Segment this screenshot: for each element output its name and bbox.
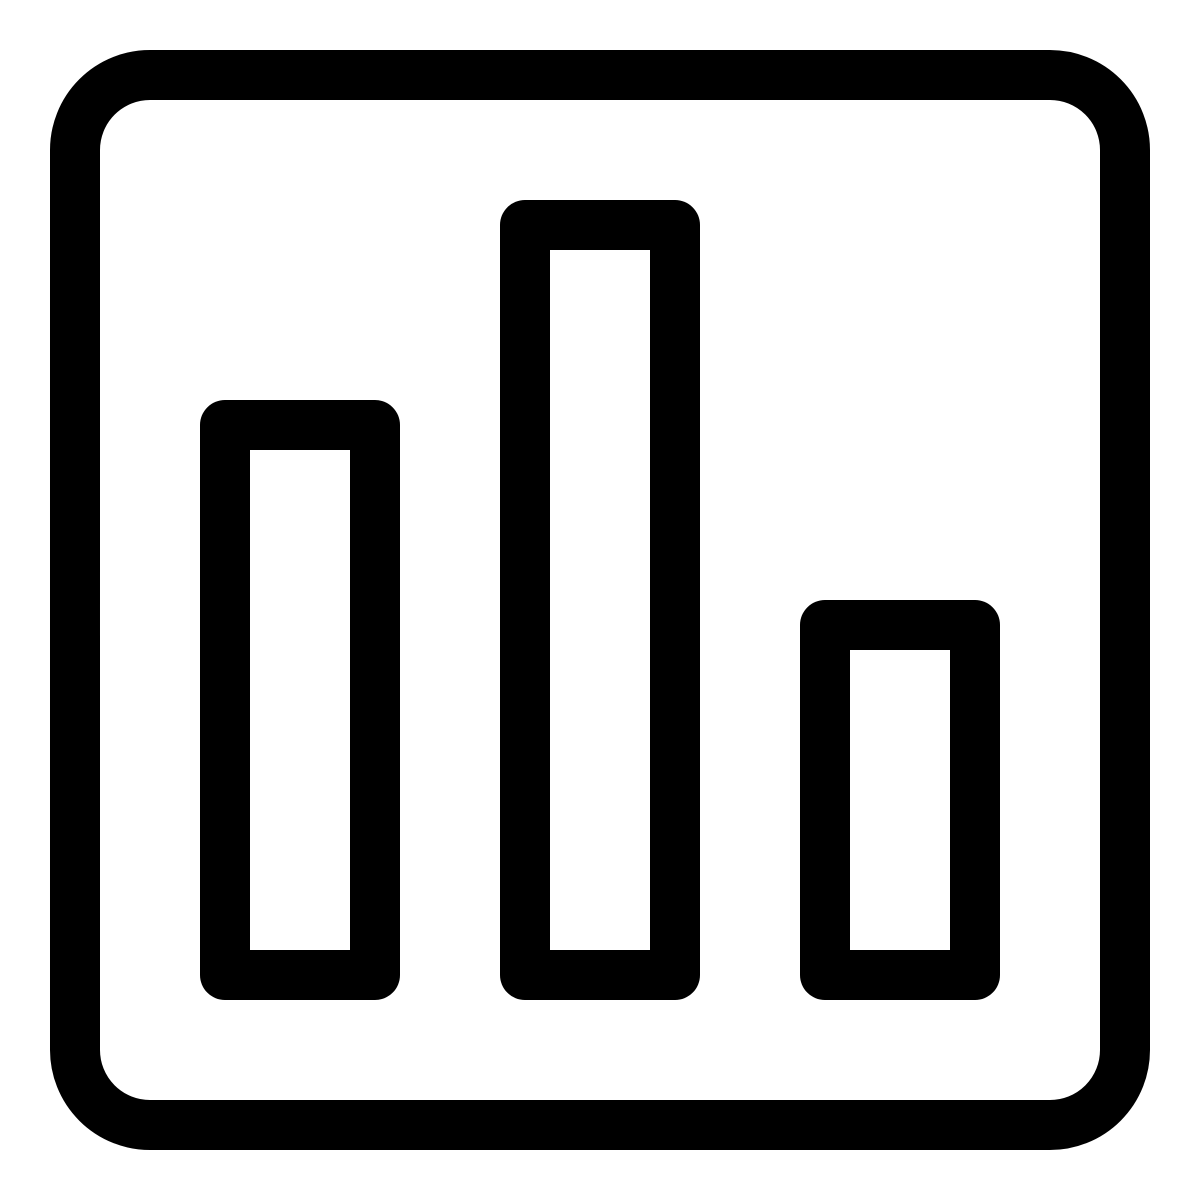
icon frame: rounded square: [75, 75, 1125, 1125]
bar: left: [225, 425, 375, 975]
bar: right: [825, 625, 975, 975]
bar: middle: [525, 225, 675, 975]
